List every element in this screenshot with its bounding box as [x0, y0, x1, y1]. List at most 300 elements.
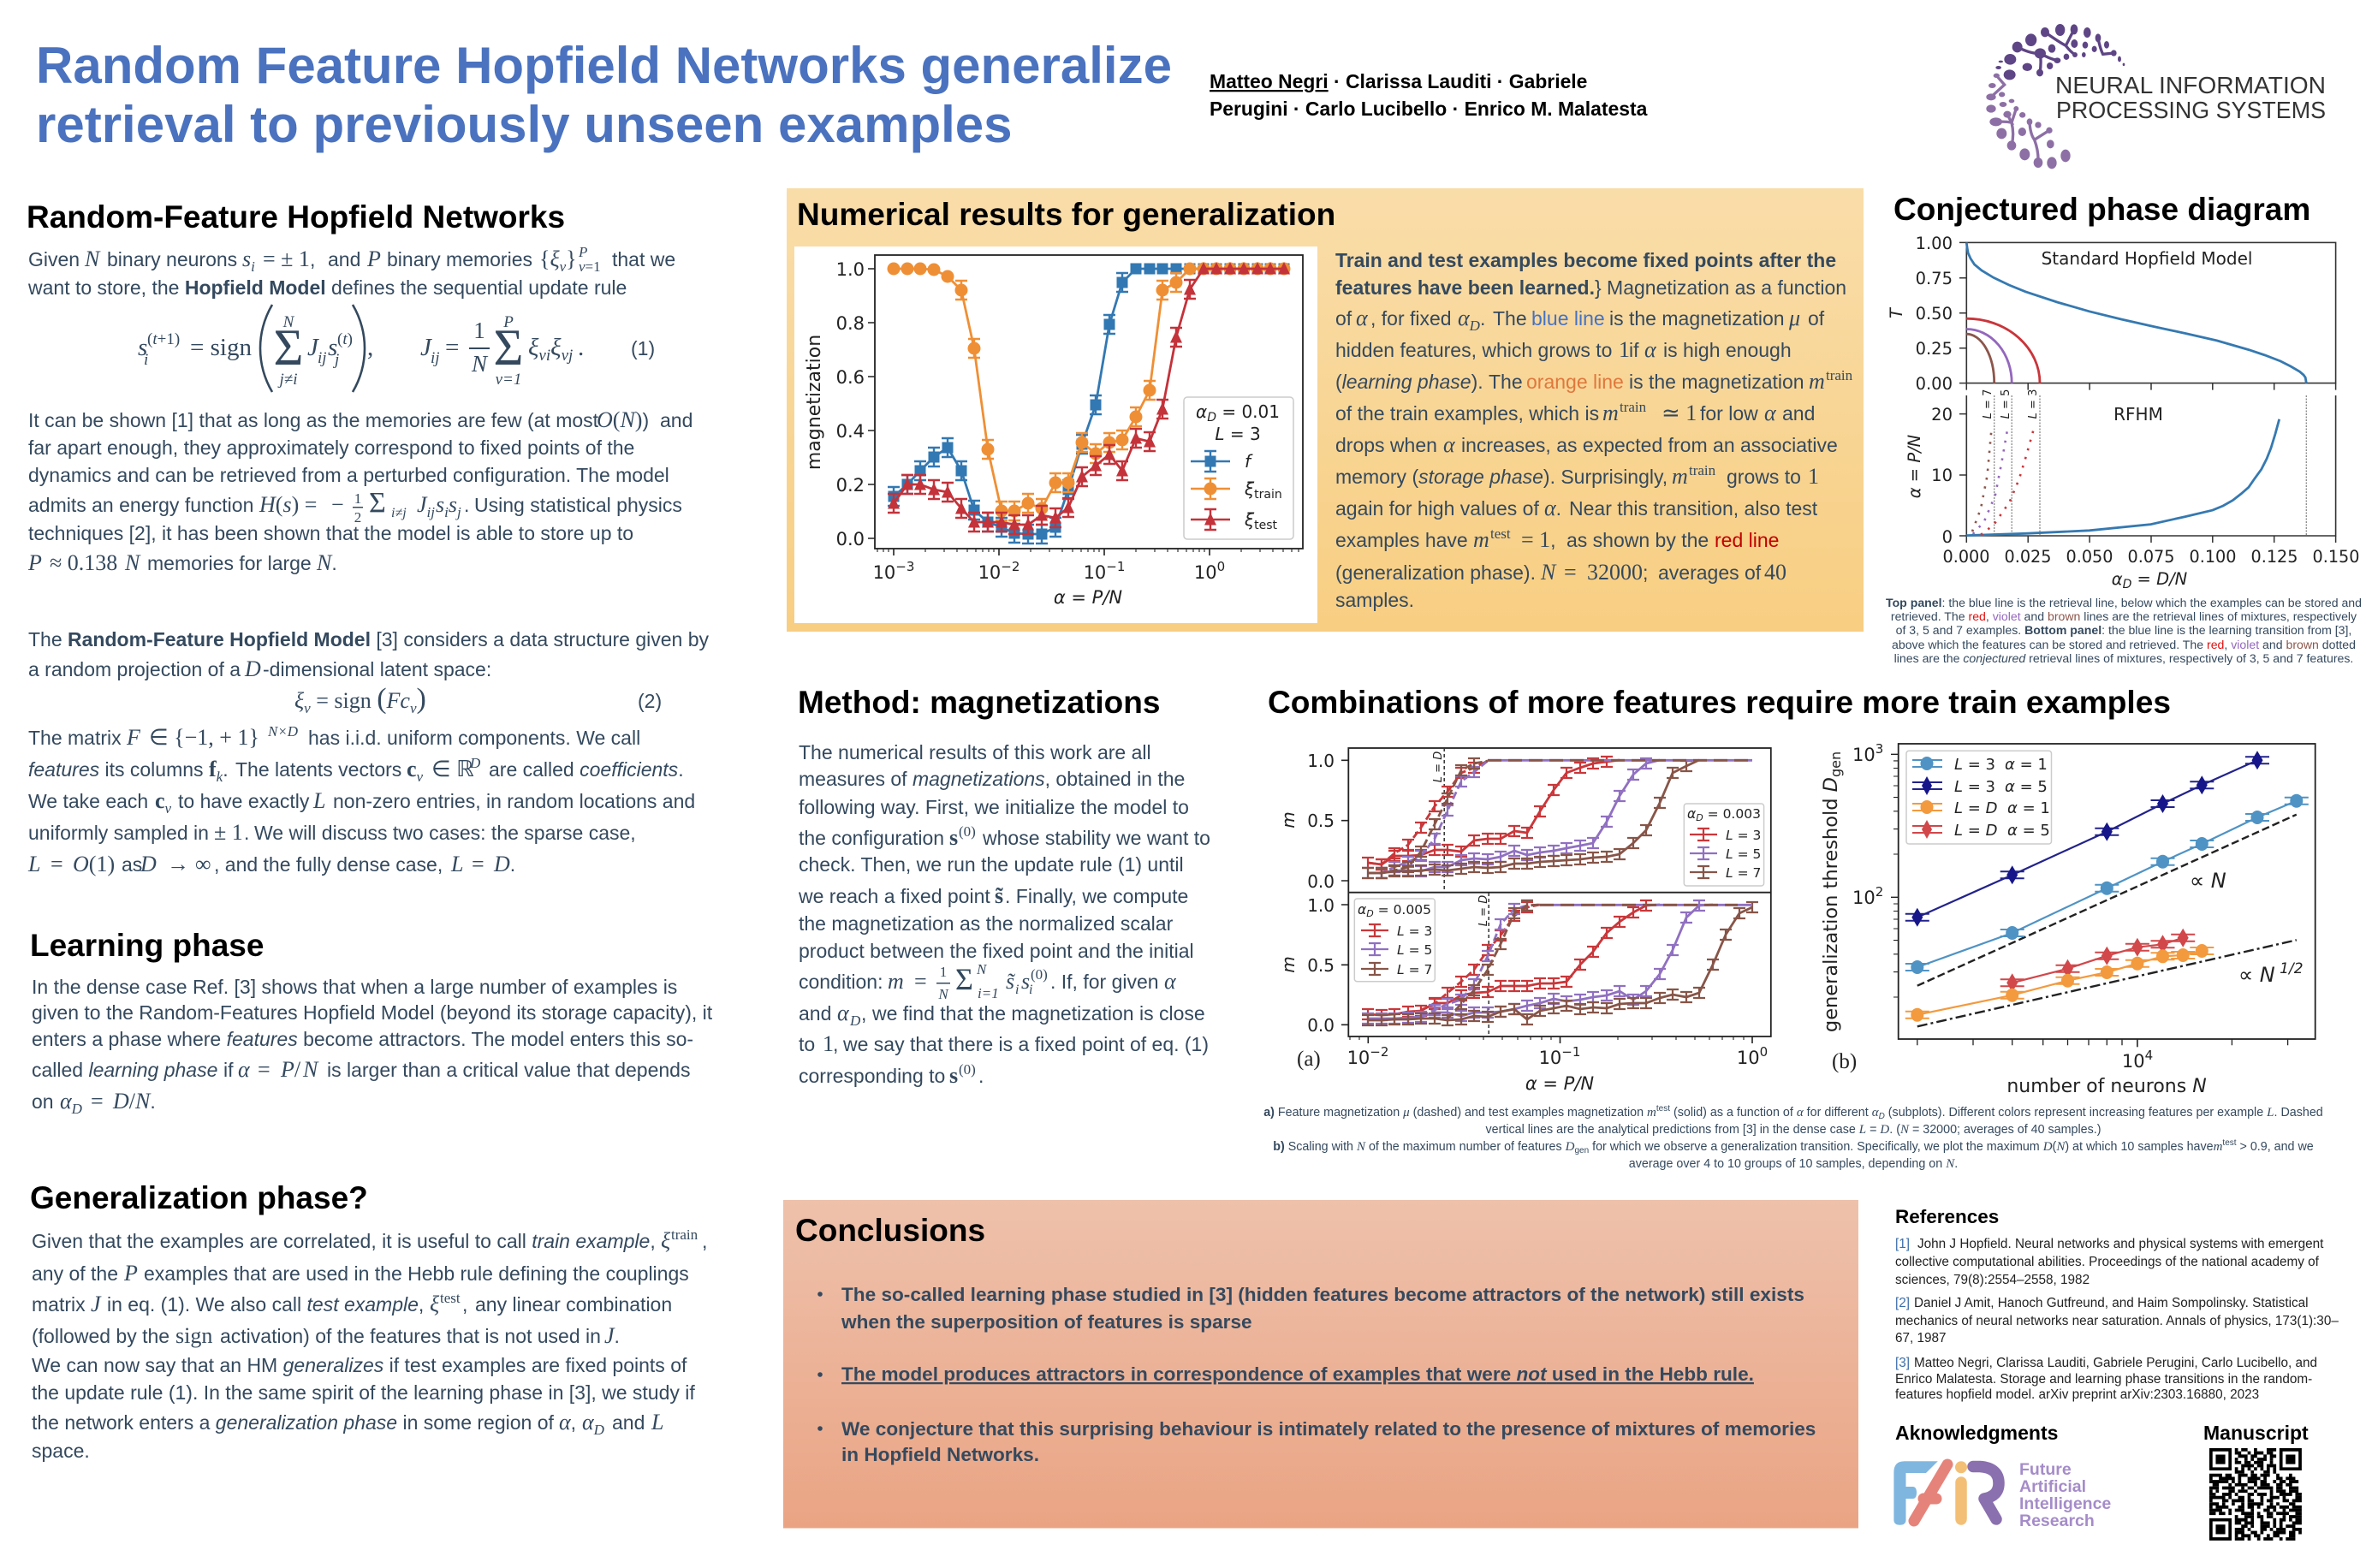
chart (a): magnetization subplots: 100 — [1737, 1044, 1768, 1068]
text block: . If, for given α — [1050, 969, 1177, 994]
text block: RFHM: D — [244, 656, 261, 681]
text block: In the dense case Ref. [3] shows that when a large number of examples is — [32, 976, 677, 998]
text block: capacity: (s) = — [276, 492, 317, 517]
text block: matrix: D — [140, 852, 157, 876]
text block: = — [258, 1057, 270, 1082]
text block: matrix: L — [312, 788, 325, 813]
icon: FAIR logo — [1893, 1460, 2111, 1530]
text block: capacity: memories for large — [147, 552, 317, 574]
series: xi test — [894, 269, 1284, 525]
text block: D — [849, 1013, 861, 1029]
chart: magnetization vs alpha: 1.0 — [836, 259, 865, 280]
text block: matrix: coefficients. — [580, 758, 684, 781]
caption: phase diagram — [1886, 596, 2362, 665]
icon: FAIR logo: Research — [2019, 1512, 2095, 1530]
chart: RFHM: α = P/N — [1905, 434, 1924, 498]
text block: test — [440, 1290, 461, 1306]
legend: top: L = 5 — [1726, 846, 1761, 862]
legend: L = D — [1954, 822, 1997, 840]
text block: numerical results explanation: hidden features, which grows to — [1335, 339, 1612, 361]
chart: standard Hopfield model: 0.50 — [1916, 304, 1953, 324]
chart: magnetization vs alpha: 0.8 — [836, 313, 865, 334]
legend: bottom: αD = 0.005 — [1358, 902, 1431, 919]
text block: α — [60, 1089, 73, 1114]
caption: phase diagram: retrieved. The red, violet and brown lines are the retrieval lines of mixtures, respectively — [1891, 609, 2357, 623]
text block: α — [238, 1057, 251, 1082]
legend: top: L = 3 — [1726, 828, 1761, 843]
equation 2: ξν = sign (Fcν) — [294, 683, 426, 716]
icon: QR code — [2209, 1450, 2302, 1539]
text block: numerical results explanation: = — [1564, 560, 1577, 585]
text block: matrix: = — [51, 852, 63, 876]
caption: combinations figure: b) Scaling with N of the maximum number of features Dgen for which we observe a generalization transition. Specifically, we plot the maximum D(N) at which 10 samples havemtest > 0.9, and we — [1273, 1138, 2314, 1155]
text block: / — [294, 1057, 301, 1082]
heading: Aknowledgments: Aknowledgments — [1895, 1422, 2058, 1444]
heading: References — [1895, 1206, 1999, 1227]
text block: product between the fixed point and the initial — [799, 940, 1194, 962]
text block: Given that the examples are correlated, it is useful to call train example, — [32, 1230, 656, 1252]
equation 2 — [294, 683, 662, 716]
text block: s — [1021, 969, 1030, 994]
text block — [32, 976, 713, 1117]
text block: numerical results explanation: α — [1443, 432, 1456, 457]
text block: . Finally, we compute — [1005, 885, 1188, 907]
chart: magnetization vs alpha: magnetization — [804, 335, 825, 470]
heading: Random-Feature Hopfield Networks — [27, 199, 565, 235]
icon: NeurIPS logo: NEURAL INFORMATION — [2055, 72, 2326, 98]
equation 1: ν=1 — [496, 371, 521, 389]
text block: numerical results explanation: of — [1335, 307, 1352, 330]
legend: bottom — [1354, 899, 1435, 982]
text block: matrix: F — [126, 725, 141, 750]
equation 1: J — [307, 334, 319, 361]
reference list: [1] — [1895, 1237, 1910, 1251]
caption: combinations figure: vertical lines are the analytical predictions from [3] in the dense case L = D. (N = 32000; averages of 40 samples.) — [1485, 1123, 2101, 1137]
reference list: features hopfield model. arXiv preprint arXiv:2303.16880, 2023 — [1895, 1387, 2259, 1402]
text block: N — [937, 986, 949, 1002]
text block: 1 — [823, 1031, 834, 1056]
text block: , — [833, 1033, 838, 1055]
chart: magnetization vs alpha: 10−2 — [978, 559, 1020, 583]
text block: numerical results explanation: Train and test examples become fixed points after the — [1335, 249, 1836, 271]
chart: magnetization vs alpha: 100 — [1194, 559, 1225, 583]
reference list: Daniel J Amit, Hanoch Gutfreund, and Haim Sompolinsky. Statistical — [1914, 1296, 2309, 1310]
text block: α — [582, 1410, 595, 1434]
text block: capacity: It can be shown [1] that as long as the memories are few (at most — [28, 409, 598, 431]
text block: = — [914, 969, 927, 994]
text block: matrix: L — [450, 852, 463, 876]
text block: intro: P — [578, 244, 587, 260]
text block: numerical results explanation: Near this transition, also test — [1569, 497, 1818, 520]
text block: activation) of the features that is not used in — [220, 1325, 606, 1347]
heading: Conclusions — [795, 1213, 985, 1248]
text block: matrix: ± 1 — [214, 820, 243, 845]
text block: /N. — [129, 1089, 156, 1114]
text block: capacity: isj — [444, 492, 461, 520]
text block: matrix: ∈ ℝ — [431, 757, 474, 781]
chart (a): magnetization subplots: 0.0 — [1307, 871, 1335, 892]
text block: matrix: The latents vectors — [235, 758, 407, 781]
text block: numerical results explanation: samples. — [1335, 589, 1414, 611]
text block: RFHM: a random projection of a — [28, 658, 241, 680]
text block: condition: — [799, 971, 883, 993]
chart (b): generalization threshold scaling — [1820, 741, 2315, 1097]
text block: numerical results explanation: increases, as expected from an associative — [1461, 434, 1838, 456]
icon: NeurIPS logo — [1986, 24, 2326, 169]
text block: matrix: D — [493, 852, 510, 876]
chart: RFHM: L = 5 — [2000, 389, 2012, 419]
text block: matrix: ∞ — [195, 852, 211, 876]
equation 1: (t+1) — [147, 330, 180, 348]
text block: matrix: N×D — [267, 723, 299, 739]
chart: RFHM: 10 — [1931, 466, 1953, 485]
legend: α = 5 — [2007, 822, 2050, 840]
text block: , — [571, 1411, 576, 1434]
text block: m — [888, 969, 904, 994]
title: Random Feature Hopfield Networks generalize — [36, 37, 1172, 94]
text block: capacity: O — [597, 407, 613, 432]
chart (b): generalization threshold scaling: 103 — [1852, 741, 1883, 765]
text block: numerical results explanation — [1335, 249, 1853, 611]
reference list: [3] — [1895, 1356, 1910, 1370]
chart: magnetization vs alpha: 0.4 — [836, 421, 865, 442]
chart (b): generalization threshold scaling: ∝ N 1/2 — [2238, 960, 2304, 987]
heading: Method: magnetizations — [798, 685, 1160, 720]
text block: L — [651, 1410, 663, 1434]
text block: D — [71, 1101, 83, 1117]
text block: numerical results explanation: ; — [1643, 561, 1648, 584]
text block: matrix: ν — [165, 800, 172, 817]
text block: capacity: − — [331, 492, 344, 517]
text block: RFHM: -dimensional latent space: — [263, 658, 491, 680]
legend: top — [1684, 804, 1764, 886]
equation 1: j — [332, 351, 339, 369]
text block: numerical results explanation: ≃ 1 — [1662, 401, 1697, 425]
text block: N — [976, 961, 988, 977]
text block: matrix: ν — [417, 769, 424, 785]
text block: s — [949, 1063, 958, 1088]
caption: combinations figure: average over 4 to 10 groups of 10 samples, depending on N. — [1629, 1157, 1958, 1171]
text block: numerical results explanation: α — [1644, 337, 1657, 362]
text block: numerical results explanation: N — [1540, 560, 1557, 585]
text block: test example, — [307, 1293, 424, 1316]
equation 1: = sign — [190, 334, 252, 361]
text block: matrix: to have exactly — [178, 790, 315, 812]
reference list: sciences, 79(8):2554–2558, 1982 — [1895, 1273, 2090, 1287]
series: top panel — [1368, 760, 1752, 873]
text block: . — [615, 1325, 620, 1347]
chart: standard Hopfield model: T — [1887, 306, 1906, 318]
text block: numerical results explanation: memory (storage phase). Surprisingly, — [1335, 466, 1667, 488]
bullet list: when the superposition of features is sparse — [841, 1311, 1252, 1333]
caption: phase diagram: Top panel: the blue line is the retrieval line, below which the examples can be stored and — [1886, 596, 2362, 609]
authors: Perugini · Carlo Lucibello · Enrico M. Malatesta — [1210, 98, 1648, 120]
text block: matrix: . — [244, 822, 249, 844]
text block: (0) — [1031, 966, 1048, 983]
text block: capacity: H — [259, 492, 276, 517]
panel: Conclusions — [783, 1200, 1858, 1529]
chart (a): magnetization subplots: 0.5 — [1307, 955, 1335, 976]
text block: enters a phase where features become attractors. The model enters this so- — [32, 1028, 693, 1050]
text block: matrix: We will discuss two cases: the sparse case, — [254, 822, 636, 844]
text block: and — [799, 1002, 831, 1025]
chart: RFHM: 0.075 — [2128, 547, 2174, 567]
text block: intro: =1 — [586, 258, 601, 275]
text block: numerical results explanation: . — [1556, 497, 1561, 520]
caption: phase diagram: above which the features can be stored and retrieved. The red, violet and brown dotted — [1892, 638, 2356, 651]
chart (a): magnetization subplots: 1.0 — [1307, 895, 1335, 916]
text block: whose stability we want to — [982, 827, 1210, 849]
chart: RFHM: 0.000 — [1943, 547, 1989, 567]
legend: ξtrain — [1244, 478, 1282, 502]
text block: α — [837, 1001, 850, 1025]
chart (a): magnetization subplots: m — [1278, 956, 1299, 973]
chart: magnetization vs alpha: 0.6 — [836, 367, 865, 388]
chart (a): magnetization subplots: (a) — [1297, 1048, 1321, 1071]
panel: Random-Feature Hopfield Networks — [27, 199, 710, 876]
text block: the network enters a generalization phase in some region of — [32, 1411, 554, 1434]
text block: capacity: i≠j — [391, 506, 407, 520]
text block: is larger than a critical value that depends — [327, 1059, 690, 1081]
text block: the magnetization as the normalized scalar — [799, 912, 1174, 935]
text block: capacity: ij — [427, 504, 435, 520]
text block: RFHM: The Random-Feature Hopfield Model [3] considers a data structure given by — [28, 628, 710, 650]
icon: FAIR logo: Artificial — [2019, 1477, 2086, 1496]
chart: magnetization vs alpha: α = P/N — [1054, 587, 1122, 608]
text block: sign — [175, 1323, 212, 1348]
text block: numerical results explanation: grows to — [1727, 466, 1806, 488]
series: f — [894, 269, 1284, 534]
series: xi train — [894, 269, 1284, 511]
text block: numerical results explanation: 32000 — [1587, 560, 1643, 585]
bullet list: The so-called learning phase studied in [3] (hidden features become attractors of the network) still exists — [841, 1284, 1804, 1305]
text block: space. — [32, 1440, 90, 1462]
text block: (0) — [959, 823, 976, 840]
text block: numerical results explanation: drops when — [1335, 434, 1437, 456]
equation 1: ξ — [528, 334, 538, 361]
text block: intro: = ± 1 — [263, 246, 310, 271]
text block: numerical results explanation: blue line — [1531, 307, 1605, 330]
text block: capacity: and — [660, 409, 693, 431]
equation 1: J — [420, 334, 432, 361]
text block: corresponding to — [799, 1065, 945, 1087]
text block: if — [223, 1059, 234, 1081]
legend: bottom: L = 3 — [1397, 924, 1432, 939]
heading: Combinations of more features require more train examples — [1268, 684, 2171, 720]
legend: αD = 0.01 — [1196, 401, 1280, 425]
text block: 1 — [940, 964, 947, 980]
equation 1: i — [144, 351, 148, 369]
text block: numerical results explanation: red line — [1715, 529, 1779, 551]
text block: matrix: non-zero entries, in random locations and — [333, 790, 695, 812]
text block: called learning phase — [32, 1059, 217, 1081]
reference list: John J Hopfield. Neural networks and physical systems with emergent — [1917, 1237, 2324, 1251]
panel: References — [1895, 1206, 2339, 1402]
text block: capacity — [27, 407, 693, 575]
text block: capacity: . — [331, 552, 337, 574]
text block: numerical results explanation: 1 — [1808, 464, 1819, 489]
text block: numerical results explanation: α — [1544, 496, 1557, 520]
text block: numerical results explanation: μ — [1788, 306, 1800, 330]
text block: intro: P — [366, 246, 381, 271]
chart (b): generalization threshold scaling: 102 — [1852, 884, 1883, 908]
legend: f — [1245, 451, 1253, 472]
bullet list: The model produces attractors in correspondence of examples that were not used in the Hebb rule. — [841, 1363, 1754, 1385]
text block: matrix: f — [209, 757, 217, 781]
text block: capacity: far apart enough, they approximately correspond to fixed points of the — [28, 437, 634, 459]
text block: i — [1015, 983, 1019, 997]
text block: matrix: , and the fully dense case, — [214, 853, 449, 876]
text block: numerical results explanation: α — [1764, 401, 1777, 425]
title — [36, 37, 1172, 153]
legend: bottom: L = 5 — [1397, 942, 1432, 958]
text block: matrix: = — [472, 852, 484, 876]
text block: ξ — [661, 1228, 671, 1253]
text block: on — [32, 1090, 54, 1113]
text block: numerical results explanation: α — [1458, 306, 1471, 330]
equation 1: P — [502, 313, 514, 331]
text block: numerical results explanation: if — [1629, 339, 1639, 361]
legend: top: L = 7 — [1726, 865, 1761, 881]
chart: RFHM: 0.150 — [2313, 547, 2359, 567]
equation 1: Σ — [494, 319, 523, 376]
text block: intro: that we — [612, 248, 675, 270]
chart (a): magnetization subplots: L = D — [1432, 751, 1445, 782]
panel: Generalization phase — [30, 1180, 707, 1462]
legend — [1184, 397, 1293, 539]
chart: standard Hopfield model: Standard Hopfield Model — [2042, 248, 2252, 269]
text block: D — [593, 1422, 605, 1438]
text block: numerical results explanation: averages of — [1658, 561, 1767, 584]
text block: (0) — [959, 1061, 976, 1078]
chart: RFHM: 0.100 — [2190, 547, 2236, 567]
text block: intro: i — [251, 258, 255, 275]
text block: numerical results explanation: is the magnetization — [1629, 371, 1810, 393]
panel: Conjectured phase diagram — [1886, 192, 2362, 665]
text block: numerical results explanation: (generalization phase). — [1335, 561, 1536, 584]
text block: s̃ — [1006, 969, 1016, 994]
chart (a): magnetization subplots: 1.0 — [1307, 751, 1335, 771]
chart: magnetization vs alpha: 0.2 — [836, 475, 865, 496]
equation 2: (2) — [638, 690, 662, 712]
text block: matrix: k. — [217, 758, 229, 785]
text block: any linear combination — [475, 1293, 672, 1316]
legend: α = 1 — [2007, 799, 2050, 817]
equation 1: . — [578, 334, 584, 361]
text block: numerical results explanation: m — [1672, 464, 1688, 489]
text block: we find that the magnetization is close — [871, 1002, 1205, 1025]
equation 1: (1) — [631, 337, 655, 359]
equation 1: 1 — [473, 318, 485, 343]
text block: following way. First, we initialize the model to — [799, 796, 1189, 818]
chart (a): magnetization subplots: L = D — [1477, 895, 1490, 926]
heading: Numerical results for generalization — [797, 197, 1335, 232]
text block: intro: and — [328, 248, 366, 270]
chart: magnetization vs alpha: 10−1 — [1084, 559, 1125, 583]
equation 1 — [138, 305, 655, 392]
text block: capacity: N — [124, 550, 141, 575]
text block: RFHM — [28, 628, 710, 681]
heading: Conjectured phase diagram — [1893, 192, 2310, 227]
text block: train — [671, 1226, 699, 1243]
chart (b): generalization threshold scaling: number of neurons N — [2006, 1076, 2207, 1097]
chart (b): generalization threshold scaling: generalization threshold Dgen — [1820, 751, 1844, 1032]
text block: numerical results explanation: train — [1620, 399, 1647, 415]
text block: numerical results explanation: = 1 — [1521, 527, 1550, 552]
equation 1: N — [471, 351, 489, 377]
text block: ξ — [430, 1292, 440, 1316]
text block: intro: ξν} — [550, 246, 577, 275]
text block: intro: , — [310, 248, 315, 270]
text block: numerical results explanation: , — [1550, 529, 1556, 551]
text block: i=1 — [978, 985, 999, 1001]
text block: matrix — [32, 1293, 86, 1316]
text block: numerical results explanation: is the magnetization — [1609, 307, 1790, 330]
chart: standard Hopfield model: 0.75 — [1916, 269, 1953, 288]
reference list: mechanics of neural networks near saturation. Annals of physics, 173(1):30– — [1895, 1314, 2339, 1328]
text block: matrix: . — [510, 853, 515, 876]
text block — [32, 1226, 707, 1462]
text block: we say that there is a fixed point of eq. (1) — [842, 1033, 1209, 1055]
text block: i — [1029, 983, 1032, 997]
reference list: [2] — [1895, 1296, 1910, 1310]
icon: FAIR logo: Intelligence — [2019, 1494, 2111, 1513]
text block: numerical results explanation: m — [1809, 369, 1825, 394]
text block: s̃ — [995, 883, 1003, 908]
panel: Combinations of more features — [1263, 684, 2323, 1171]
text block: N — [302, 1057, 319, 1082]
equation 1: νj — [562, 347, 573, 365]
text block: matrix: c — [407, 757, 417, 781]
text block: matrix: O — [73, 852, 89, 876]
equation 1: Σ — [274, 319, 303, 376]
text block: numerical results explanation: is high enough — [1663, 339, 1792, 361]
text block: matrix: → — [167, 852, 189, 876]
text block: matrix: D — [469, 755, 481, 771]
chart (a): magnetization subplots: 0.0 — [1307, 1015, 1335, 1036]
legend: L = D — [1954, 799, 1997, 817]
text block: J — [91, 1292, 102, 1316]
equation 1: ij — [431, 349, 440, 367]
text block: D — [112, 1089, 129, 1114]
chart: magnetization vs alpha: 10−3 — [873, 559, 914, 583]
chart (a): magnetization subplots: 10−2 — [1347, 1044, 1388, 1068]
text block: capacity: techniques [2], it has been shown that the model is able to store up to — [28, 522, 633, 544]
icon: FAIR logo: Future — [2019, 1460, 2072, 1479]
text block: numerical results explanation: examples have — [1335, 529, 1468, 551]
text block: capacity: 2 — [354, 509, 361, 526]
caption: combinations figure: a) Feature magnetization μ (dashed) and test examples magnetization mtest (solid) as a function of α for different αD (subplots). Different colors represent increasing features per example L. Dashed — [1263, 1104, 2323, 1121]
text block: numerical results explanation: (learning phase). — [1335, 371, 1483, 393]
text block: given to the Random-Features Hopfield Model (beyond its storage capacity), it — [32, 1001, 713, 1024]
chart: RFHM: RFHM — [2113, 404, 2163, 425]
heading: Generalization phase? — [30, 1180, 368, 1215]
chart (b): generalization threshold scaling: 104 — [2122, 1048, 2153, 1072]
text block: We can now say that an HM generalizes if test examples are fixed points of — [32, 1354, 687, 1376]
text block: P — [280, 1057, 294, 1082]
text block — [798, 741, 1210, 1088]
text block: = — [91, 1089, 104, 1114]
text block: numerical results explanation: of the train examples, which is — [1335, 402, 1599, 425]
text block: intro: ν — [579, 258, 586, 275]
text block: intro: want to store, the Hopfield Model defines the sequential update rule — [27, 276, 627, 299]
chart (a): magnetization subplots: 0.5 — [1307, 811, 1335, 831]
text block: matrix: The matrix — [28, 727, 122, 749]
text block: capacity: . — [464, 494, 469, 516]
legend: L = 3 — [1215, 424, 1261, 444]
text block: intro — [27, 244, 675, 299]
text block: matrix: (1) — [89, 852, 115, 876]
